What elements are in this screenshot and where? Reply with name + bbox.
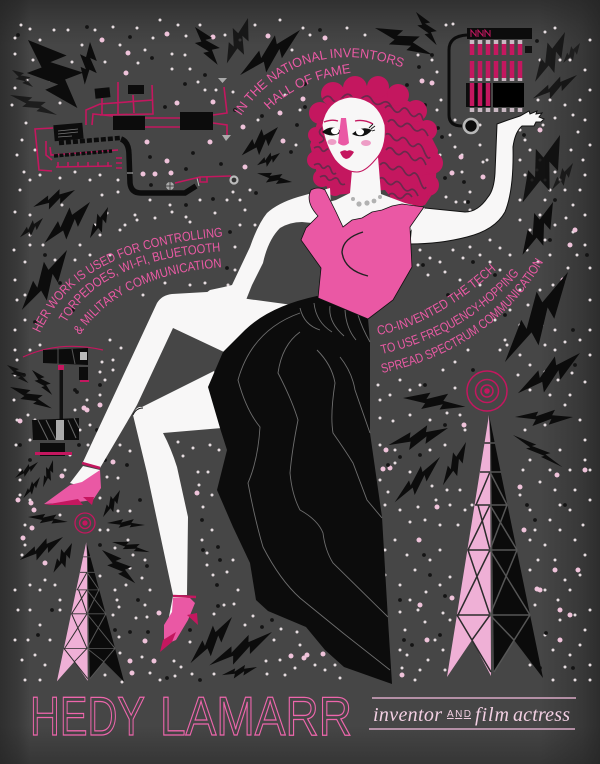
face [322, 97, 385, 172]
lower thigh and calf [133, 371, 232, 595]
cheeks [328, 139, 371, 146]
nose [338, 118, 349, 146]
neck and chest [318, 157, 425, 240]
tagline: film [475, 704, 509, 726]
lips [340, 150, 354, 159]
title: HEDY [30, 685, 145, 747]
shoe back [160, 596, 198, 652]
tagline: AND [447, 709, 471, 720]
circuit diagram top left [35, 78, 238, 193]
right arm [410, 111, 544, 244]
small tower target [75, 513, 95, 533]
caption: co-invented: CO-INVENTED THE TECH [378, 264, 496, 334]
hair [307, 76, 443, 207]
skirt [208, 296, 392, 684]
big radio tower [447, 415, 543, 678]
small radio tower [57, 542, 124, 682]
small text captions: TO USE FREQUENCY-HOPPING [380, 269, 518, 354]
tagline [373, 704, 570, 726]
shoe front [44, 463, 101, 505]
tagline: inventor [373, 704, 442, 726]
device left [23, 346, 103, 456]
left arm [206, 188, 332, 305]
large pink dots [18, 34, 585, 675]
necklace [351, 195, 382, 207]
tagline rules [369, 698, 576, 729]
raised leg [83, 292, 300, 468]
title [30, 685, 352, 747]
radio device top right [449, 28, 532, 133]
bodice [301, 188, 424, 319]
title: LAMARR [160, 685, 352, 747]
caption: hall of fame: IN THE NATIONAL INVENTORS [234, 48, 404, 115]
small text captions: HALL OF FAME [264, 64, 350, 110]
small text captions: & MILITARY COMMUNICATION [74, 258, 221, 334]
small text captions: SPREAD SPECTRUM COMMUNICATION [381, 258, 543, 372]
figure: Hedy Lamarr [44, 76, 544, 684]
small text captions [32, 48, 543, 372]
big tower target [467, 371, 507, 411]
small text captions: TORPEDOES, WI-FI, BLUETOOTH [58, 242, 220, 320]
caption: her work: HER WORK IS USED FOR CONTROLLING [32, 228, 222, 332]
tagline: actress [513, 704, 570, 726]
eyes [322, 120, 375, 136]
skirt folds [238, 303, 390, 670]
